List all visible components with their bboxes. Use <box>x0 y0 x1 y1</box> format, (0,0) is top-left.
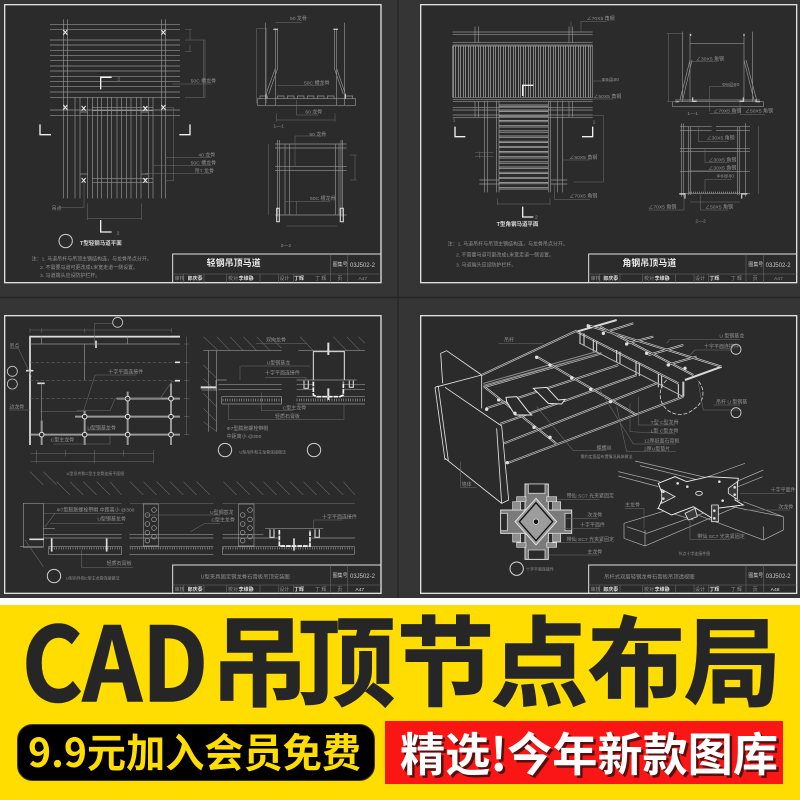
main title: CAD <box>22 584 208 731</box>
title block: 页 <box>753 587 758 593</box>
section 2-2 <box>648 123 758 225</box>
detail 3 long section: C型主龙骨 <box>211 516 235 523</box>
title block: A47 <box>774 276 783 282</box>
title block <box>589 565 797 593</box>
detail 1 and 2 sections: C型主龙骨 <box>283 404 306 411</box>
cross connector plan detail A: 带仙 SC7 光夹紧固定 <box>567 536 614 543</box>
title block: 设计 <box>695 586 705 593</box>
drawing notes: 注：1. 马道吊杆与吊顶主钢结构连，与龙骨吊点分开。 <box>448 240 568 247</box>
title block: 丁辉 <box>294 586 304 593</box>
detail 1 and 2 sections: 双向龙骨 <box>266 337 286 344</box>
section 2-2: ∠30X5 角钢 <box>707 134 735 141</box>
title block: 丁 辉 <box>315 586 326 593</box>
isometric structure: 吊杆 U 型钢基 <box>716 399 747 406</box>
ceiling grid plan <box>7 317 189 476</box>
isometric structure: U 型钢基龙 <box>719 333 744 340</box>
isometric structure: 十字平面连接件 <box>704 343 739 350</box>
plan title with number circle <box>59 234 122 248</box>
section 1-1 <box>667 32 773 117</box>
T-type light steel catwalk plan <box>40 19 216 236</box>
title block: 图集号 <box>748 261 763 268</box>
title block: 校对 <box>644 275 654 282</box>
white separator strip <box>0 598 800 605</box>
detail 1 and 2 sections: 中距离小 @300 <box>227 433 262 440</box>
section 2-2 <box>268 131 357 249</box>
title block: 李维静 <box>239 275 254 282</box>
section 1-1: 50 龙骨 <box>290 15 307 22</box>
ceiling grid plan: 边龙骨 <box>9 404 24 411</box>
section 1-1: 1—1 <box>687 111 698 117</box>
panel: light steel ceiling catwalk drawing <box>5 5 381 283</box>
title block: 郎庆泰 <box>603 275 618 282</box>
cross connector isometric detail: 次龙骨 <box>778 504 793 511</box>
cross connector isometric detail: 节点十字连接件图 <box>678 550 710 556</box>
detail 3 long section: U型钢基龙 <box>210 509 234 516</box>
drawing notes: 2. 不需要马道可更改成1米宽走道一侧设置。 <box>456 251 554 258</box>
title block <box>589 254 797 283</box>
title block <box>173 254 381 283</box>
title block: 郎庆泰 <box>188 586 203 593</box>
T-type angle steel catwalk plan <box>453 15 621 228</box>
ceiling grid plan: 十字平面连接件 <box>108 368 143 375</box>
title block: 丁辉 <box>709 586 719 593</box>
cross connector plan detail A: 带仙 SC7 光夹紧固定 <box>567 492 614 499</box>
panel: isometric ceiling structure drawing <box>421 316 797 593</box>
ceiling grid plan: U型吊件和C型主龙骨连接平面图 <box>67 470 124 476</box>
title block: A47 <box>358 276 367 282</box>
ceiling grid plan: C型主龙骨 <box>51 437 74 444</box>
drawing notes <box>448 240 568 268</box>
title block: 设计 <box>695 275 705 282</box>
detail 3 long section: 轻质石膏板 <box>107 560 132 567</box>
title block: 页 <box>337 276 342 282</box>
isometric structure: 12厚纸面石膏板 <box>644 438 679 445</box>
T-type angle steel catwalk plan: ∠70X5 角钢 <box>569 193 597 200</box>
drawing notes: 3. 马道端头应设防护栏杆。 <box>456 261 516 268</box>
title block: 审核 <box>175 586 185 593</box>
title block: 图集号 <box>333 261 348 268</box>
T-type angle steel catwalk plan: 1 <box>593 119 596 125</box>
red promo box: 精选!今年新款图库 <box>402 722 780 788</box>
cross connector isometric detail: 十字平面件 <box>771 487 796 494</box>
title block: 图集号 <box>333 572 348 579</box>
title block: 审核 <box>591 586 601 593</box>
detail 1 and 2 sections: 轻质石膏板 <box>275 413 300 420</box>
title block: 03J502-2 <box>766 263 791 269</box>
isometric structure: 蝶螺丝 <box>597 444 612 451</box>
section 1-1 <box>257 15 356 130</box>
T-type angle steel catwalk plan: Φ8@80 <box>602 77 619 83</box>
title block: 审核 <box>175 275 185 282</box>
section 2-2: 2—2 <box>281 243 291 249</box>
red promo box: 精选!今年新款图库 <box>400 719 778 785</box>
section 2-2: 50 龙骨 <box>309 131 326 138</box>
detail 1 and 2 sections: U型吊件和主龙骨连接做法 <box>239 448 286 454</box>
drawing notes: 3. 马道端头应设防护栏杆。 <box>40 272 100 279</box>
title block: 页 <box>753 276 758 282</box>
section 1-1: 60 龙骨 <box>305 108 322 115</box>
title block: 页 <box>337 587 342 593</box>
title block: 审核 <box>591 275 601 282</box>
yellow banner <box>0 584 800 800</box>
cross connector plan detail A <box>501 484 614 575</box>
plan title with number circle: T型轻钢马道平面 <box>80 239 122 247</box>
title block: 李维静 <box>239 586 254 593</box>
detail 1 and 2 sections <box>201 337 365 457</box>
title block: A47 <box>355 587 364 593</box>
cross connector plan detail A: 次龙骨 <box>587 512 602 519</box>
section 1-1: 50C 槽龙骨 <box>304 79 329 86</box>
cross connector plan detail A: 主龙骨 <box>587 548 602 555</box>
T-type light steel catwalk plan: 2 <box>117 230 120 236</box>
title block: 03J502-2 <box>350 574 376 580</box>
T-type light steel catwalk plan: 50C 槽龙骨 <box>191 78 216 85</box>
T-type angle steel catwalk plan: ∠50X5 角钢 <box>593 93 621 100</box>
title block: 李维静 <box>655 586 670 593</box>
title block: 03J502-2 <box>350 263 376 269</box>
membership pill: 9.9元加入会员免费 <box>28 721 361 779</box>
section 1-1: 1—1 <box>273 124 284 130</box>
cross connector isometric detail: 主龙骨 <box>625 502 640 509</box>
isometric structure <box>435 320 747 503</box>
T-type angle steel catwalk plan: ∠50X5 角钢 <box>569 154 597 161</box>
T-type light steel catwalk plan: 2 <box>117 77 120 83</box>
section 1-1: ∠50X5 角钢 <box>745 108 773 115</box>
main title: 吊顶节点布局 <box>211 585 781 726</box>
section 2-2: ∠30X5 角钢 <box>708 164 736 171</box>
section 2-2: ∠50X5 角钢 <box>705 204 733 211</box>
detail 3 long section: U型吊件和C型主龙骨连接做法 <box>66 574 120 580</box>
drawing notes: 注：1. 马道吊杆与吊顶主钢结构连，与龙骨吊点分开。 <box>32 256 152 263</box>
isometric structure: 吊杆 <box>504 337 514 344</box>
title block: 丁辉 <box>294 275 304 282</box>
section 1-1: ∠30X5 角钢 <box>696 56 724 63</box>
section 2-2: 50C 槽龙骨 <box>310 195 335 202</box>
T-type light steel catwalk plan: 吊T 龙骨 <box>195 168 214 175</box>
section 2-2: Φ8@80 <box>717 174 734 180</box>
title block: U型夹具固定钢龙骨石膏板吊顶安装图 <box>201 573 290 581</box>
title block: 设计 <box>279 275 289 282</box>
isometric structure: 需约定面层布置情况具体做法 <box>581 453 632 459</box>
title block: 轻钢吊顶马道 <box>207 257 261 268</box>
isometric structure: 2厚U型垫片 <box>644 446 670 453</box>
T-type angle steel catwalk plan: 2 <box>535 214 538 220</box>
section 2-2: ∠70X5 角钢 <box>648 203 676 210</box>
isometric structure: T型 C型龙骨 <box>651 419 679 426</box>
drawing notes <box>32 256 152 279</box>
title block: 丁辉 <box>709 275 719 282</box>
section 1-1: ∠70X5 角钢 <box>713 108 741 115</box>
title block: 丁 辉 <box>731 586 742 593</box>
detail 3 long section: 十字平面连接件 <box>322 514 357 521</box>
T-type light steel catwalk plan: 50C 槽龙骨 <box>191 160 216 167</box>
title block: 郎庆泰 <box>603 586 618 593</box>
T-type angle steel catwalk plan: T型角钢马道平面 <box>497 220 539 228</box>
cross connector plan detail A: 十字平面连接件 <box>526 565 554 571</box>
T-type angle steel catwalk plan: 1 <box>453 118 456 124</box>
isometric structure: 墙体 <box>462 481 472 488</box>
title block: 丁 辉 <box>731 275 742 282</box>
title block: 设计 <box>279 586 289 593</box>
detail 1 and 2 sections: U型钢基龙 <box>267 360 290 367</box>
detail 1 and 2 sections: Φ7型膨胀螺栓带帽 <box>227 425 268 432</box>
title block: 校对 <box>644 586 654 593</box>
title block: 郎庆泰 <box>188 275 203 282</box>
title block: 03J502-2 <box>766 574 791 580</box>
title block: 角钢吊顶马道 <box>622 257 676 268</box>
T-type angle steel catwalk plan: ∠70X5 角钢 <box>587 15 615 22</box>
title block: 校对 <box>228 586 238 593</box>
detail 1 and 2 sections: 十字平面连接件 <box>265 370 300 377</box>
ceiling grid plan: U型钢基龙骨 <box>87 424 116 431</box>
cross connector plan detail A: 十字平面件 <box>580 522 605 529</box>
section 2-2: 2—2 <box>695 219 706 225</box>
title block: 李维静 <box>655 275 670 282</box>
title block <box>173 565 381 593</box>
title block: 图集号 <box>748 572 763 579</box>
title block: 吊杆式双层轻钢龙骨石膏板吊顶透视图 <box>604 573 695 581</box>
isometric structure: L型 C型龙骨 <box>651 427 678 434</box>
T-type light steel catwalk plan: 吊点 <box>52 206 62 212</box>
detail 3 long section: Φ7型膨胀螺栓带帽 中距离小 @300 <box>57 506 135 513</box>
section 2-2: ∠30X5 角钢 <box>708 156 736 163</box>
cross connector isometric detail <box>618 461 796 556</box>
detail 3 long section <box>20 472 357 583</box>
title block: 丁 辉 <box>315 275 326 282</box>
T-type light steel catwalk plan: 40 龙骨 <box>198 152 215 159</box>
drawing notes: 2. 不需要马道可更改成1米宽走道一侧设置。 <box>40 264 138 271</box>
title block: A48 <box>771 587 780 593</box>
detail 3 long section: U型钢基龙骨 <box>97 516 126 523</box>
section 1-1: Φ8@80 <box>722 82 740 88</box>
ceiling grid plan: 吊点 <box>9 343 19 349</box>
panel: angle steel ceiling catwalk drawing <box>421 5 797 283</box>
title block: 校对 <box>228 275 238 282</box>
cross connector isometric detail: 带仙 SC7 光夹紧固定 <box>697 533 745 540</box>
panel: U-channel ceiling layout drawing <box>5 316 381 593</box>
